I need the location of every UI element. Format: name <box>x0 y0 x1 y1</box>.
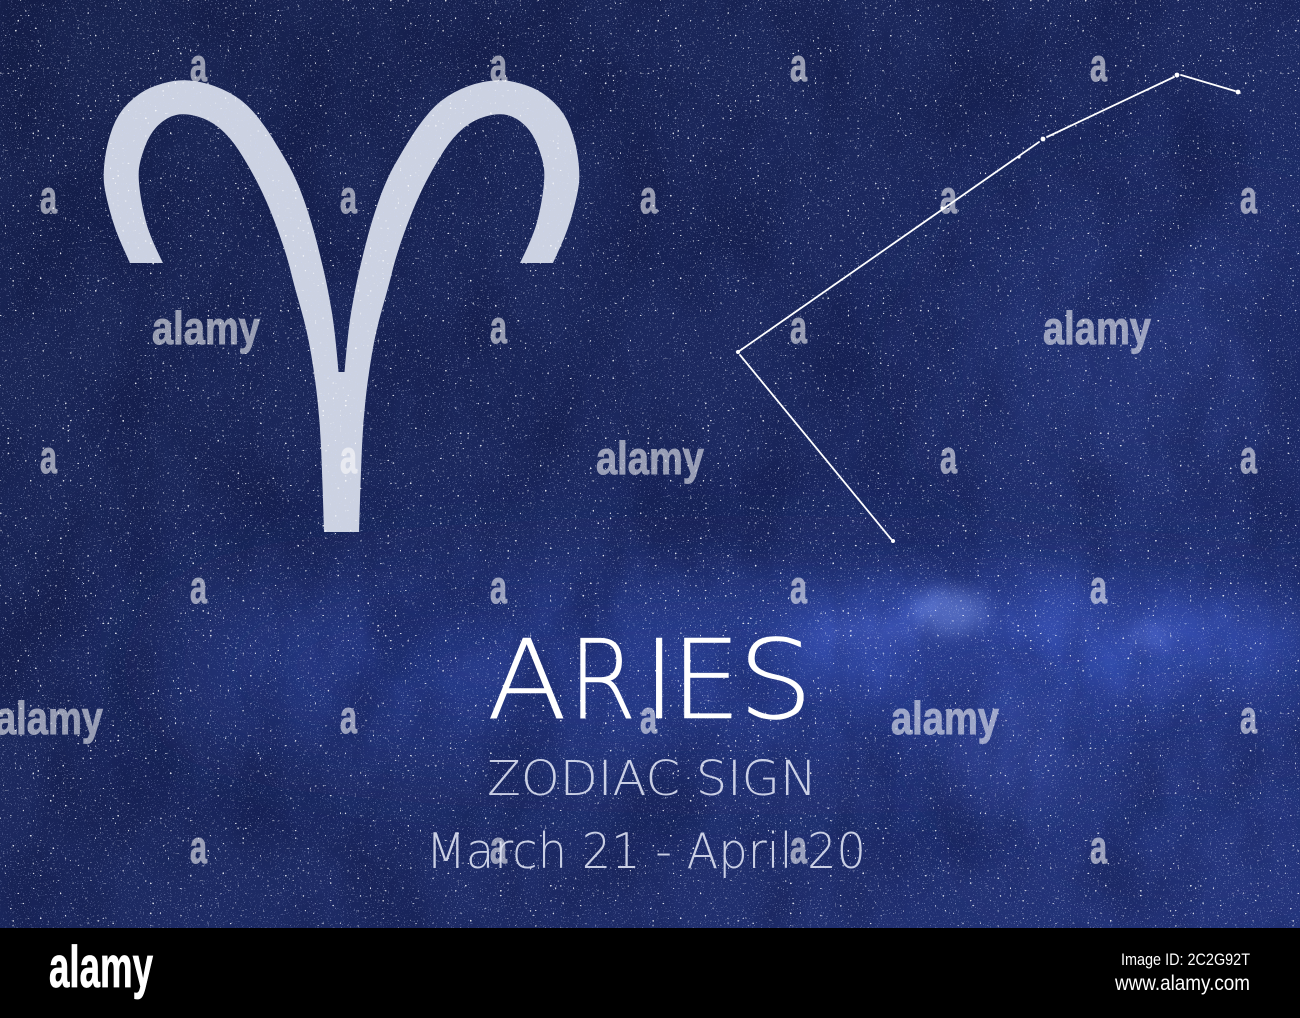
watermarks: a <box>790 561 807 613</box>
watermarks: a <box>640 171 657 223</box>
watermarks: a <box>1090 39 1107 91</box>
watermarks: a <box>40 431 57 483</box>
footer bar <box>0 928 1300 1018</box>
watermarks: a <box>490 821 507 873</box>
watermarks: a <box>340 431 357 483</box>
icon: Aries ram-horn glyph <box>104 80 579 532</box>
watermarks: a <box>790 821 807 873</box>
watermarks: a <box>490 561 507 613</box>
website: www.alamy.com <box>1114 972 1250 995</box>
watermarks: a <box>190 821 207 873</box>
title: ARIES: E <box>671 616 741 744</box>
title: ARIES: A <box>487 616 567 744</box>
watermarks: a <box>40 171 57 223</box>
watermarks: a <box>190 561 207 613</box>
watermarks: a <box>340 691 357 743</box>
footer logo: alamy <box>49 935 153 1000</box>
watermarks: a <box>490 301 507 353</box>
watermarks: alamy <box>152 302 260 354</box>
watermarks: a <box>340 171 357 223</box>
watermarks: a <box>490 39 507 91</box>
watermarks: a <box>1240 691 1257 743</box>
title: ARIES: S <box>738 616 813 744</box>
title: ARIES <box>487 616 813 744</box>
watermarks: alamy <box>1043 302 1151 354</box>
title: ARIES: R <box>568 616 636 744</box>
watermarks: a <box>790 301 807 353</box>
watermarks: a <box>1240 171 1257 223</box>
milky way band <box>160 230 1300 890</box>
subtitle: ZODIAC SIGN: ZODIAC SIGN <box>487 751 817 807</box>
watermarks <box>0 39 1257 873</box>
watermarks: a <box>1090 821 1107 873</box>
watermarks: alamy <box>891 692 999 744</box>
watermarks: a <box>790 39 807 91</box>
watermarks: a <box>190 39 207 91</box>
constellation stars <box>736 73 1240 543</box>
watermarks: a <box>640 691 657 743</box>
image id: Image ID: 2C2G92T <box>1121 950 1250 969</box>
watermarks: a <box>940 431 957 483</box>
title: ARIES: I <box>643 616 675 744</box>
date range: March 21 - April 20 <box>426 823 866 880</box>
constellation: Aries star lines <box>736 73 1240 543</box>
watermarks: a <box>1090 561 1107 613</box>
watermarks: a <box>1240 431 1257 483</box>
watermarks: alamy <box>596 432 704 484</box>
watermarks: a <box>940 171 957 223</box>
